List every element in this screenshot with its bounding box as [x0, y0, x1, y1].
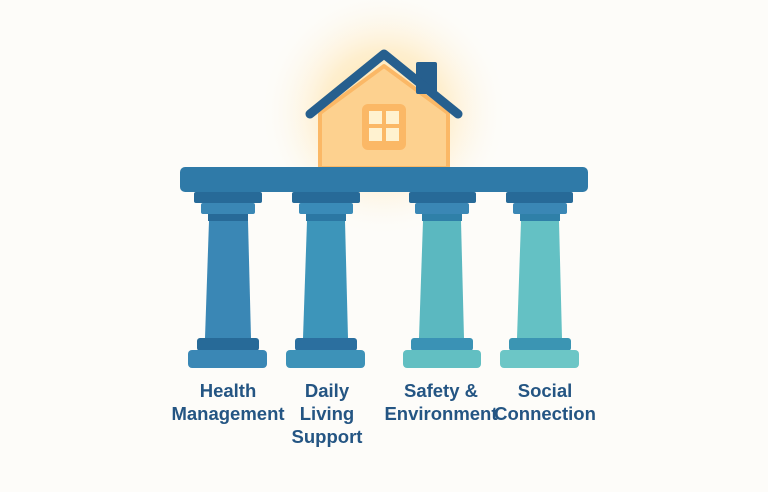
label: Daily Living Support: Support: [292, 426, 362, 447]
label: Social Connection: Social: [518, 380, 572, 401]
label: Safety & Environment: Safety &: [404, 380, 478, 401]
label: Social Connection: Connection: [494, 403, 596, 424]
label: Daily Living Support: Living: [300, 403, 354, 424]
icon: house: [310, 54, 458, 168]
glow behind house: [259, 0, 509, 237]
beam: [180, 167, 588, 192]
label: Health Management: Management: [171, 403, 285, 424]
label: Safety & Environment: Environment: [384, 403, 498, 424]
pillar 4: Social Connection: [500, 192, 579, 368]
pillar 2: Daily Living Support: [286, 192, 365, 368]
pillar 1: Health Management: [188, 192, 267, 368]
pillar 3: Safety & Environment: [403, 192, 481, 368]
label: Daily Living Support: Daily: [305, 380, 349, 401]
label: Health Management: Health: [200, 380, 256, 401]
